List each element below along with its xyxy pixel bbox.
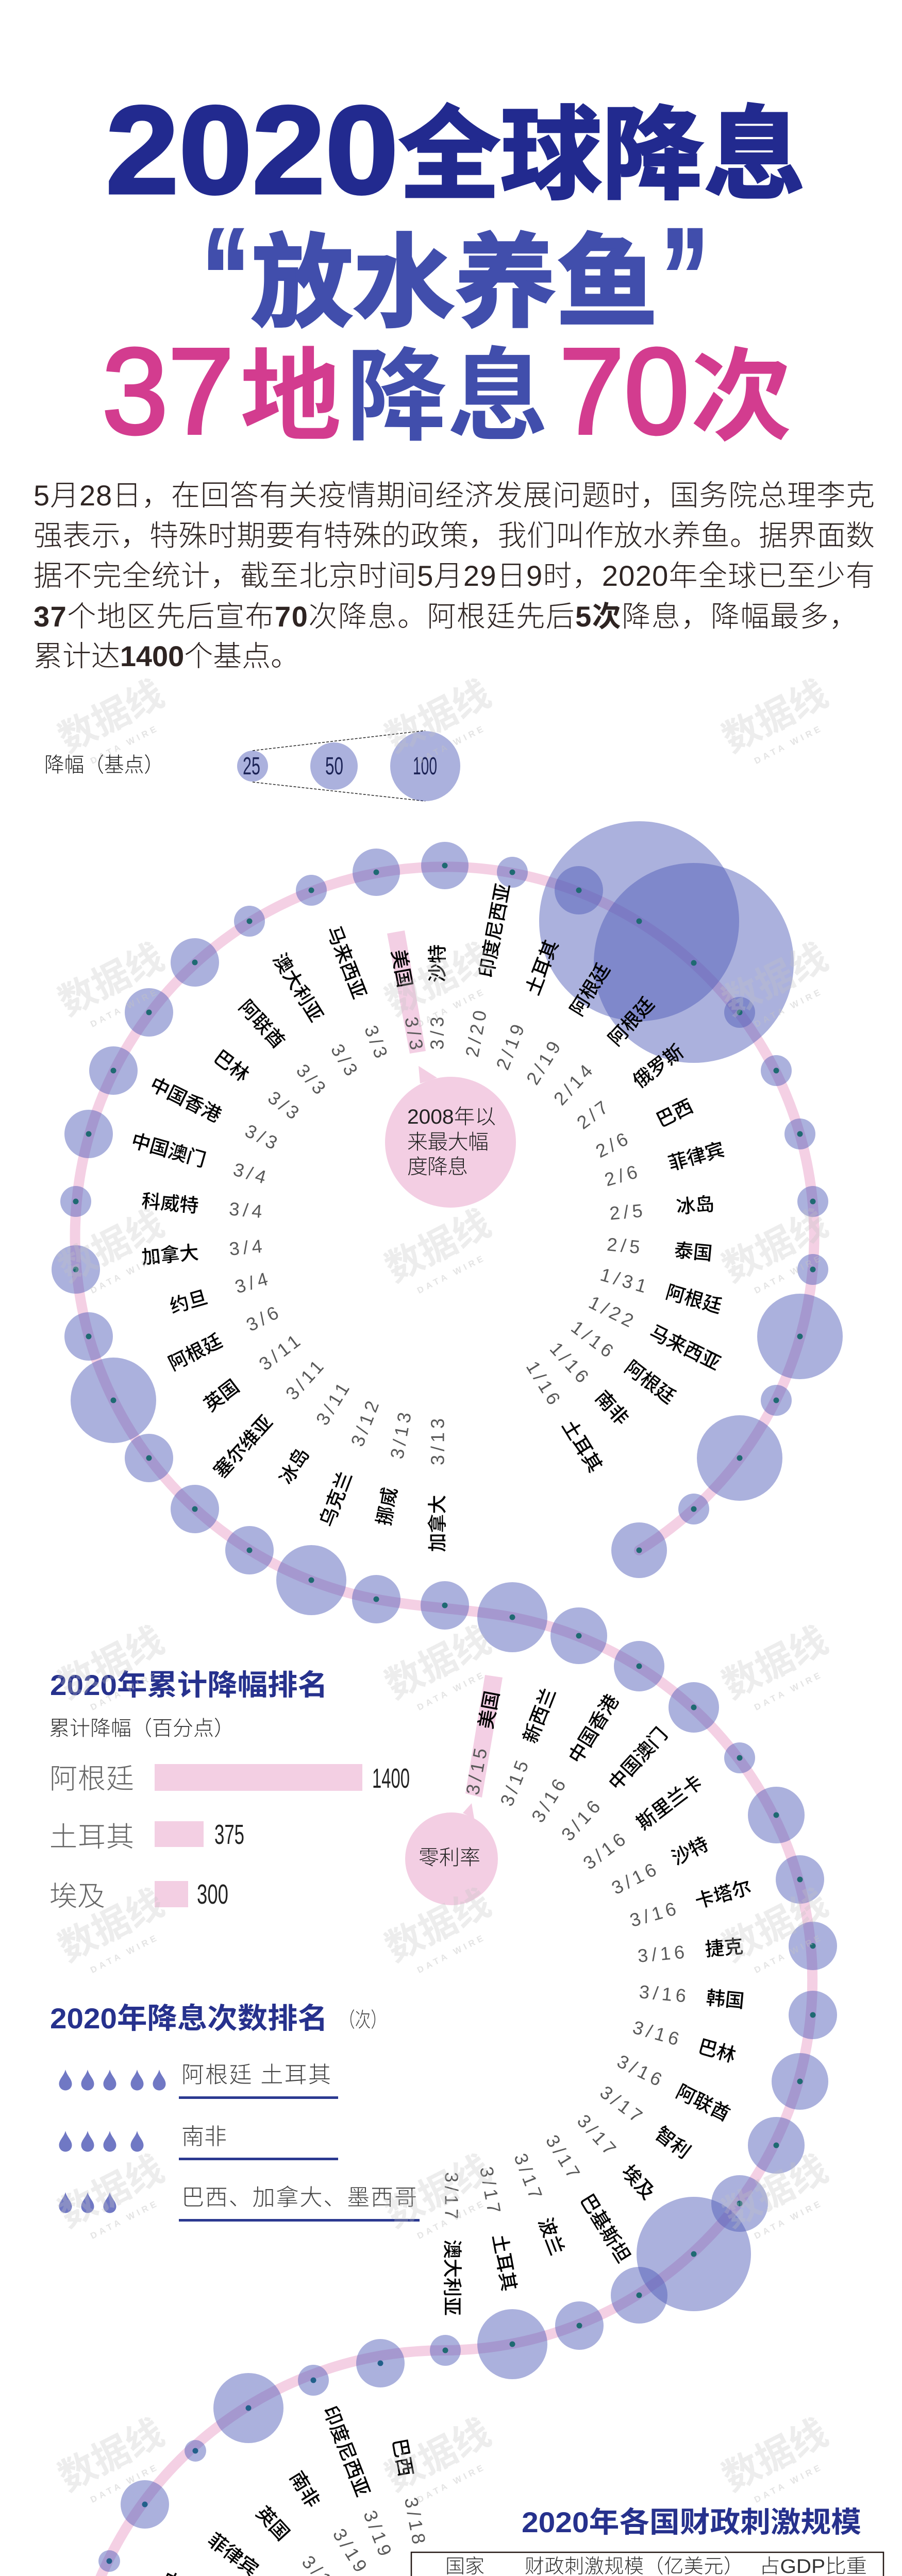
panel: cumulative cut ranking xyxy=(49,1669,410,1912)
text: DATA WIRE xyxy=(89,1669,161,1713)
label: 巴林 3/16: 巴林 xyxy=(696,2036,738,2066)
text: 数据线 xyxy=(716,1619,834,1707)
label: 巴西 3/18: 3/18 xyxy=(400,2496,430,2549)
intro text: 强表示，特殊时期要有特殊的政策，我们叫作放水养鱼。据界面数 xyxy=(34,519,875,552)
label: 捷克 3/16: 捷克 xyxy=(704,1936,744,1960)
label: 马来西亚 3/3 xyxy=(323,923,393,1064)
label: 澳大利亚 3/3 xyxy=(269,950,364,1082)
label: 泰国 2/5: 泰国 xyxy=(673,1240,713,1264)
table frame xyxy=(411,2552,883,2576)
label: 波兰 3/17 xyxy=(510,2150,567,2258)
label: 美国 3/3: 3/3 xyxy=(400,1015,428,1055)
label: 沙特 3/3 xyxy=(427,944,448,1050)
label: 约旦 3/4 xyxy=(168,1267,274,1317)
intro text xyxy=(34,479,875,672)
label: 乌克兰 3/12 xyxy=(316,1395,385,1530)
text: DATA WIRE xyxy=(753,1669,825,1713)
row: 土耳其 375: 375 xyxy=(214,1819,244,1850)
heading: （次） xyxy=(339,2009,387,2031)
legend circle 25 xyxy=(237,751,268,782)
label: 中国香港 3/3 xyxy=(147,1074,284,1155)
label: 乌克兰 3/12: 3/12 xyxy=(346,1395,385,1449)
text: DATA WIRE xyxy=(415,2198,488,2241)
text: DATA WIRE xyxy=(753,1932,825,1975)
text: 数据线 xyxy=(53,2148,170,2235)
title line 1 xyxy=(106,80,805,220)
title line 3: 降息 xyxy=(346,341,548,453)
legend label: 降幅（基点） xyxy=(44,754,164,776)
label: 韩国 3/16 xyxy=(638,1981,745,2012)
label: 印度尼西亚 2/20: 2/20 xyxy=(461,1005,491,1059)
text: DATA WIRE xyxy=(753,2462,825,2505)
callout: 2008年以来最大幅度降息: 2008年以 xyxy=(407,1106,496,1128)
label: 巴西 2/6: 巴西 xyxy=(653,1095,696,1131)
labels: loop 1 right side xyxy=(427,882,727,1476)
text: DATA WIRE xyxy=(89,986,161,1029)
label: 英国 3/19 xyxy=(252,2502,347,2576)
text: 数据线 xyxy=(379,2412,497,2499)
label: 斯里兰卡 3/16 xyxy=(579,1771,706,1874)
label: 新西兰 3/15: 3/15 xyxy=(496,1754,534,1809)
highlight bar: 美国 3/3 xyxy=(387,930,426,1054)
row: three drops 巴西、加拿大、墨西哥: 巴西、加拿大、墨西哥 xyxy=(181,2185,417,2210)
intro text: 5月28日，在回答有关疫情期间经济发展问题时，国务院总理李克 xyxy=(34,479,875,512)
label: 阿根廷 3/6: 阿根廷 xyxy=(165,1330,226,1375)
text: DATA WIRE xyxy=(89,1252,161,1296)
text: DATA WIRE xyxy=(89,2198,161,2241)
label: 菲律宾 2/6: 菲律宾 xyxy=(666,1139,727,1175)
label: 冰岛 2/5: 冰岛 xyxy=(675,1193,715,1218)
text: 数据线 xyxy=(379,2148,497,2235)
intro text: 据不完全统计，截至北京时间5月29日9时，2020年全球已至少有 xyxy=(34,560,875,592)
title line 2: ” xyxy=(661,200,709,355)
label: 阿联酋 3/3: 阿联酋 xyxy=(235,996,289,1053)
label: 挪威 3/13: 挪威 xyxy=(373,1486,401,1527)
table header xyxy=(445,2556,867,2576)
label: 马来西亚 1/22: 马来西亚 xyxy=(646,1321,724,1374)
label: 土耳其 2/19: 土耳其 xyxy=(522,937,562,998)
text: 数据线 xyxy=(53,2412,170,2499)
label: 中国澳门 3/16 xyxy=(557,1724,672,1845)
label: 埃及 3/17: 埃及 xyxy=(617,2161,659,2204)
label: 英国 3/11 xyxy=(200,1328,307,1416)
heading: 2020年累计降幅排名 xyxy=(50,1669,328,1701)
label: 中国香港 3/16: 中国香港 xyxy=(565,1691,623,1767)
label: 挪威 3/13: 3/13 xyxy=(386,1407,416,1461)
callout: 2008年以来最大幅度降息: 度降息 xyxy=(407,1156,468,1178)
label: 印度尼西亚 2/20: 印度尼西亚 xyxy=(476,882,514,979)
label: 泰国 2/5: 2/5 xyxy=(606,1233,644,1258)
label: 阿根廷 2/14: 阿根廷 xyxy=(604,993,659,1050)
label: 印度尼西亚 3/19: 印度尼西亚 xyxy=(319,2403,374,2500)
label: 阿根廷 2/14: 2/14 xyxy=(549,1058,599,1109)
row: 阿根廷 1400 xyxy=(49,1763,410,1794)
text: DATA WIRE xyxy=(753,2198,825,2241)
label: 中国香港 3/3: 3/3 xyxy=(242,1120,284,1155)
text: 数据线 xyxy=(716,1882,834,1970)
label: 阿联酋 3/3 xyxy=(235,996,332,1101)
label: 沙特 3/3: 3/3 xyxy=(427,1013,447,1050)
callout: 2008年以来最大幅度降息 xyxy=(385,1066,516,1208)
label: 冰岛 2/5 xyxy=(609,1193,715,1224)
label: 菲律宾 2/6: 2/6 xyxy=(602,1160,643,1190)
text: 数据线 xyxy=(716,2148,834,2235)
row: three drops 巴西、加拿大、墨西哥 xyxy=(59,2185,420,2222)
spiral line xyxy=(71,867,814,2576)
label: 澳大利亚 3/17: 澳大利亚 xyxy=(441,2240,463,2316)
legend: size scale xyxy=(44,731,460,801)
text: DATA WIRE xyxy=(415,2462,488,2505)
label: 冰岛 3/11: 冰岛 xyxy=(275,1445,313,1488)
label: 加拿大 3/13: 3/13 xyxy=(427,1415,448,1465)
label: 波兰 3/17: 3/17 xyxy=(510,2150,548,2205)
label: 卡塔尔 3/16 xyxy=(627,1876,754,1931)
label: 阿根廷 1/16: 阿根廷 xyxy=(621,1357,679,1408)
text: 数据线 xyxy=(53,936,170,1024)
text: DATA WIRE xyxy=(753,986,825,1029)
text: 数据线 xyxy=(379,1882,497,1970)
label: 土耳其 3/17 xyxy=(476,2165,520,2293)
label: 冰岛 3/11: 3/11 xyxy=(312,1376,355,1429)
label: 斯里兰卡 3/16: 斯里兰卡 xyxy=(633,1771,706,1834)
text: 数据线 xyxy=(716,2412,834,2499)
label: 土耳其 2/19: 2/19 xyxy=(492,1018,530,1073)
text: DATA WIRE xyxy=(753,1252,825,1296)
label: 巴林 3/16: 3/16 xyxy=(630,2016,685,2050)
bubble centre dots: loops 1 and 2 xyxy=(73,862,815,2353)
label: 中国香港 3/16: 3/16 xyxy=(527,1772,572,1826)
label: 加拿大 3/4 xyxy=(141,1235,266,1268)
intro text: 累计达1400个基点。 xyxy=(34,640,299,672)
text: 数据线 xyxy=(53,1882,170,1970)
label: 塞尔维亚 3/11 xyxy=(210,1353,330,1482)
row: 阿根廷 1400: 1400 xyxy=(372,1763,410,1794)
row: five drops 阿根廷 土耳其 xyxy=(59,2062,338,2099)
label: 澳大利亚 3/3: 3/3 xyxy=(327,1040,364,1082)
label: 波兰 3/17: 波兰 xyxy=(534,2215,567,2258)
callout: 零利率 xyxy=(405,1803,498,1905)
label: 韩国 3/16: 韩国 xyxy=(705,1987,745,2012)
label: 阿根廷 1/16: 1/16 xyxy=(567,1316,620,1364)
label: 智利 3/17: 3/17 xyxy=(596,2081,649,2129)
label: 南非 1/16 xyxy=(546,1338,632,1429)
label: 英国 3/11: 英国 xyxy=(200,1376,243,1416)
title line 2: 放水养鱼 xyxy=(252,227,658,340)
label: 美国 3/15 xyxy=(462,1689,503,1797)
text: DATA WIRE xyxy=(89,2462,161,2505)
label: 阿联酋 3/16: 3/16 xyxy=(614,2050,669,2092)
label: 塞尔维亚 3/11: 塞尔维亚 xyxy=(210,1411,277,1482)
label: 加拿大 3/4: 3/4 xyxy=(228,1235,266,1260)
text: DATA WIRE xyxy=(415,1252,488,1296)
label: 约旦 3/4: 3/4 xyxy=(232,1267,274,1297)
label: 智利 3/17 xyxy=(596,2081,694,2163)
row: four drops 南非 xyxy=(59,2124,338,2160)
labels: loop 3 xyxy=(144,2403,657,2576)
text: DATA WIRE xyxy=(89,723,161,766)
row: 埃及 300: 埃及 xyxy=(49,1881,105,1912)
label: 埃及 3/17: 3/17 xyxy=(573,2110,623,2162)
title line 3: 37 xyxy=(102,323,234,460)
label: 中国澳门 3/16: 3/16 xyxy=(557,1793,607,1845)
label: 巴林 3/3: 巴林 xyxy=(210,1046,253,1086)
legend circle 50: 50 xyxy=(325,753,343,780)
label: 捷克 3/16 xyxy=(637,1936,744,1967)
label: 科威特 3/4: 科威特 xyxy=(141,1191,199,1216)
label: 中国香港 3/3: 中国香港 xyxy=(147,1074,224,1126)
legend dashed guide lines xyxy=(253,731,425,801)
label: 南非 1/16: 1/16 xyxy=(546,1338,595,1389)
label: 阿根廷 2/19: 2/19 xyxy=(522,1035,566,1088)
label: 巴西 2/6: 2/6 xyxy=(592,1127,634,1162)
label: 中国香港 3/16 xyxy=(527,1691,623,1826)
text: DATA WIRE xyxy=(415,986,488,1029)
text: 数据线 xyxy=(379,936,497,1024)
label: 科威特 3/4: 3/4 xyxy=(228,1198,266,1223)
label: 阿联酋 3/3: 3/3 xyxy=(292,1060,332,1101)
label: 美国 3/3 xyxy=(388,948,428,1055)
text: DATA WIRE xyxy=(415,1932,488,1975)
label: 土耳其 3/17: 3/17 xyxy=(476,2165,506,2218)
text: 数据线 xyxy=(53,1202,170,1290)
label: 中国澳门 3/4: 3/4 xyxy=(231,1159,272,1189)
label: 中国澳门 3/4: 中国澳门 xyxy=(129,1130,208,1171)
label: 土耳其 1/16 xyxy=(522,1357,606,1476)
label: 俄罗斯 2/7 xyxy=(573,1041,688,1133)
label: 巴西 2/6 xyxy=(592,1095,696,1162)
title line 3: 次 xyxy=(691,341,792,453)
label: 埃及 3/17 xyxy=(573,2110,659,2204)
row: 埃及 300 xyxy=(49,1879,228,1912)
label: 美国 3/3: 美国 xyxy=(388,948,415,989)
highlight bar: 美国 3/15 xyxy=(465,1675,503,1798)
label: 英国 3/19: 英国 xyxy=(252,2502,293,2545)
label: 沙特 3/3: 沙特 xyxy=(427,944,448,982)
title line 3: 地 xyxy=(240,341,341,453)
panel: number of cuts ranking xyxy=(50,2002,420,2222)
label: 土耳其 1/16: 土耳其 xyxy=(558,1416,606,1476)
label: 新西兰 3/15: 新西兰 xyxy=(520,1685,560,1746)
label: 泰国 2/5 xyxy=(606,1233,713,1264)
label: 澳大利亚 3/17 xyxy=(441,2172,463,2316)
label: 美国 3/15: 美国 xyxy=(475,1689,503,1731)
label: 土耳其 2/19 xyxy=(492,937,562,1073)
label: 冰岛 3/11 xyxy=(275,1376,355,1488)
label: 巴基斯坦 3/17 xyxy=(542,2131,634,2266)
labels: loop 1 left side xyxy=(129,923,448,1552)
label: 马来西亚 1/22 xyxy=(586,1292,724,1374)
label: 斯里兰卡 3/16: 3/16 xyxy=(579,1826,632,1874)
title line 2 xyxy=(202,200,709,355)
label: 南非 3/19 xyxy=(286,2468,373,2576)
row: 土耳其 375 xyxy=(49,1819,244,1853)
label: 澳大利亚 3/3: 澳大利亚 xyxy=(269,950,327,1026)
label: 智利 3/17: 智利 xyxy=(651,2123,694,2163)
label: 韩国 3/16: 3/16 xyxy=(638,1981,691,2007)
label: 捷克 3/16: 3/16 xyxy=(637,1941,689,1967)
panel: fiscal stimulus table xyxy=(411,2506,883,2576)
label: 冰岛 2/5: 2/5 xyxy=(609,1199,647,1224)
label: 俄罗斯 2/7: 2/7 xyxy=(573,1094,615,1133)
label: 中国澳门 3/4 xyxy=(129,1130,272,1189)
label: 沙特 3/16 xyxy=(608,1833,712,1899)
row: four drops 南非: 南非 xyxy=(181,2124,227,2149)
title xyxy=(102,80,805,460)
label: 阿根廷 1/16 xyxy=(567,1316,679,1408)
text: 数据线 xyxy=(53,1619,170,1707)
label: 俄罗斯 2/7: 俄罗斯 xyxy=(629,1041,688,1092)
row: 阿根廷 1400: 阿根廷 xyxy=(49,1764,134,1794)
label: 沙特 3/16: 3/16 xyxy=(608,1857,663,1899)
label: 巴基斯坦 3/17: 巴基斯坦 xyxy=(576,2190,634,2266)
label: 马来西亚 1/22: 1/22 xyxy=(586,1292,640,1333)
label: 土耳其 3/17: 土耳其 xyxy=(489,2233,520,2293)
legend circle 100: 100 xyxy=(413,753,437,780)
label: 加拿大 3/4: 加拿大 xyxy=(141,1242,199,1268)
label: 阿联酋 3/16 xyxy=(614,2050,733,2125)
intro text: 37个地区先后宣布70次降息。阿根廷先后5次降息，降幅最多， xyxy=(34,600,858,633)
text: DATA WIRE xyxy=(89,1932,161,1975)
label: 科威特 3/4 xyxy=(141,1191,266,1223)
label: 阿根廷 3/6: 3/6 xyxy=(243,1300,285,1335)
label: 阿根廷 2/19: 阿根廷 xyxy=(566,960,614,1020)
label: 阿根廷 2/19 xyxy=(522,960,614,1088)
label: 英国 3/11: 3/11 xyxy=(255,1328,307,1375)
title line 1: 2020 xyxy=(106,80,398,220)
label: 塞尔维亚 3/11: 3/11 xyxy=(281,1353,330,1404)
label: 巴基斯坦 3/17: 3/17 xyxy=(542,2131,586,2185)
label: 阿根廷 1/31 xyxy=(598,1264,724,1317)
label: 澳大利亚 3/17: 3/17 xyxy=(441,2172,462,2223)
label: 巴西 3/18 xyxy=(389,2437,430,2549)
label: 挪威 3/13 xyxy=(373,1407,416,1527)
label: 约旦 3/4: 约旦 xyxy=(168,1286,210,1317)
title line 1: 全球降息 xyxy=(399,99,805,212)
label: 马来西亚 3/3: 3/3 xyxy=(360,1022,393,1064)
title line 3 xyxy=(102,323,792,460)
label: 阿根廷 2/14 xyxy=(549,993,659,1109)
callout: 2008年以来最大幅度降息: 来最大幅 xyxy=(407,1131,489,1154)
label: 美国 3/15: 3/15 xyxy=(462,1743,492,1797)
text: 数据线 xyxy=(53,673,170,760)
label: 印度尼西亚 3/19: 3/19 xyxy=(359,2507,397,2562)
legend circle 100 xyxy=(390,731,460,801)
labels: loop 2 xyxy=(441,1685,754,2316)
callout: 零利率: 零利率 xyxy=(419,1846,480,1869)
label: 马来西亚 3/3: 马来西亚 xyxy=(323,923,370,1002)
text: 数据线 xyxy=(716,673,834,760)
label: 乌克兰 3/12: 乌克兰 xyxy=(316,1469,356,1530)
label: 菲律宾 2/6 xyxy=(602,1139,727,1190)
row: 土耳其 375: 土耳其 xyxy=(49,1822,134,1853)
text: DATA WIRE xyxy=(753,723,825,766)
row: 埃及 300: 300 xyxy=(197,1879,228,1910)
label: 阿根廷 1/31: 1/31 xyxy=(598,1264,653,1298)
label: 巴林 3/3: 3/3 xyxy=(264,1087,306,1126)
text: 数据线 xyxy=(379,1619,497,1707)
title line 3: 70 xyxy=(559,323,689,460)
label: 巴林 3/16 xyxy=(630,2016,738,2066)
bubble centre dots: loop 3 xyxy=(67,2361,687,2576)
label: 阿根廷 1/31: 阿根廷 xyxy=(663,1281,724,1317)
label: 巴林 3/3 xyxy=(210,1046,306,1126)
table heading: 2020年各国财政刺激规模 xyxy=(522,2506,861,2538)
text: 数据线 xyxy=(716,1202,834,1290)
label: 印度尼西亚 2/20 xyxy=(461,882,514,1059)
label: 加拿大 3/13 xyxy=(427,1415,448,1552)
label: 卡塔尔 3/16: 3/16 xyxy=(627,1897,682,1931)
label: 中国澳门 3/16: 中国澳门 xyxy=(605,1724,672,1794)
label: 巴西 3/18: 巴西 xyxy=(389,2437,416,2478)
legend circle 25: 25 xyxy=(243,753,260,780)
text: 数据线 xyxy=(379,673,497,760)
row: five drops 阿根廷 土耳其: 阿根廷 土耳其 xyxy=(181,2062,331,2088)
heading: 2020年降息次数排名 xyxy=(50,2002,328,2035)
label: 阿联酋 3/16: 阿联酋 xyxy=(673,2081,733,2125)
text: DATA WIRE xyxy=(415,723,488,766)
bubbles: rate cuts 1–70 xyxy=(42,821,843,2576)
label: 新西兰 3/15 xyxy=(496,1685,560,1809)
label: 土耳其 1/16: 1/16 xyxy=(522,1357,566,1412)
title line 2: “ xyxy=(202,200,249,355)
label: 南非 1/16: 南非 xyxy=(591,1387,632,1429)
label: 南非 3/19: 南非 xyxy=(286,2468,324,2511)
label: 阿根廷 3/6 xyxy=(165,1300,285,1375)
text: 数据线 xyxy=(716,936,834,1024)
label: 沙特 3/16: 沙特 xyxy=(669,1833,712,1869)
sub-heading: 累计降幅（百分点） xyxy=(49,1717,235,1740)
legend circle 50 xyxy=(310,742,358,790)
label: 印度尼西亚 3/19 xyxy=(319,2403,397,2562)
text: 数据线 xyxy=(379,1202,497,1290)
label: 加拿大 3/13: 加拿大 xyxy=(427,1495,448,1552)
label: 卡塔尔 3/16: 卡塔尔 xyxy=(693,1876,754,1912)
text: DATA WIRE xyxy=(415,1669,488,1713)
